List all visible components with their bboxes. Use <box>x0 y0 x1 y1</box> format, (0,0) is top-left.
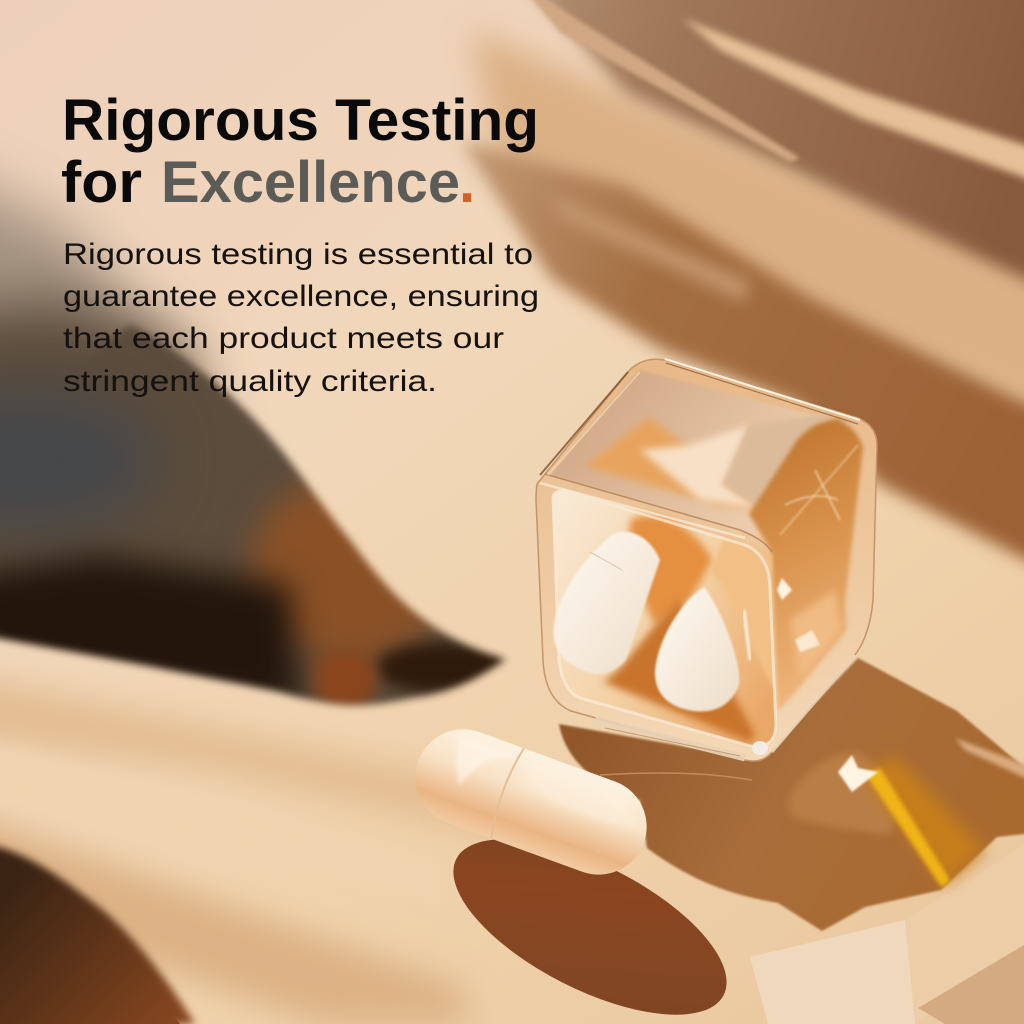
body text: stringent quality criteria. <box>63 365 437 398</box>
loose capsule <box>402 716 660 888</box>
heading <box>61 88 539 215</box>
pale light patches bottom right <box>750 845 1024 1024</box>
heading: Rigorous Testing <box>62 88 539 153</box>
front face of cube <box>553 491 776 747</box>
capsule inside cube <box>553 532 660 674</box>
glass cube with capsules <box>536 359 877 761</box>
cube shadow with refracted light <box>559 658 1024 931</box>
second capsule inside cube <box>655 587 739 712</box>
large dark shadow on fabric <box>0 160 509 711</box>
heading: Excellence <box>161 150 460 215</box>
body text: that each product meets our <box>63 322 504 355</box>
heading: for <box>61 150 142 215</box>
loose capsule shadow <box>428 804 752 1024</box>
body text <box>63 238 539 398</box>
amber behind capsules <box>603 515 775 742</box>
top face of cube <box>550 370 850 540</box>
right face of cube <box>749 419 863 711</box>
body text: guarantee excellence, ensuring <box>63 280 539 313</box>
glass highlights <box>540 359 860 758</box>
heading: . <box>459 150 475 215</box>
body text: Rigorous testing is essential to <box>63 238 533 271</box>
dark shadow bottom left <box>0 840 195 1024</box>
